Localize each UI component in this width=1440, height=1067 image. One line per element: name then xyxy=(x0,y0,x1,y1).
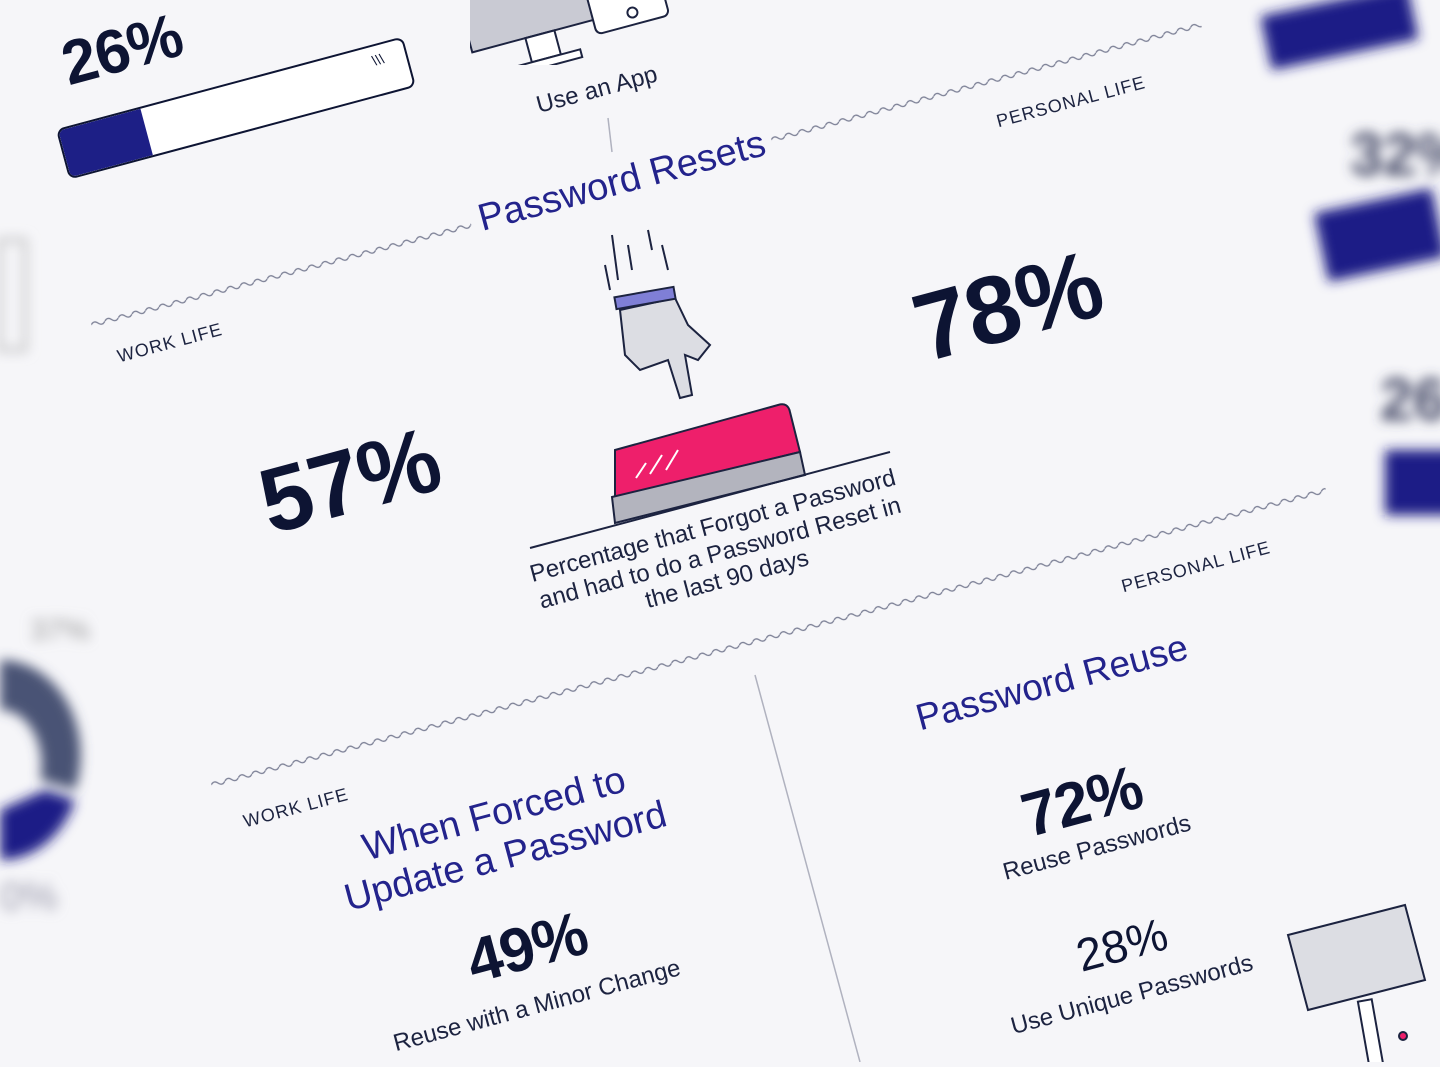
stat: 49%: 49% xyxy=(460,899,594,997)
wavy line: top right xyxy=(770,20,1202,145)
icon: hand pressing button xyxy=(530,230,890,549)
label: personal life 2: PERSONAL LIFE xyxy=(1119,537,1273,596)
caption: forgot password: Percentage that Forgot a Password xyxy=(527,464,899,588)
label: work life: WORK LIFE xyxy=(115,319,225,366)
label: work life 2: WORK LIFE xyxy=(241,784,351,831)
blurred left donut: 37% xyxy=(30,614,90,647)
progress bar xyxy=(56,36,416,180)
label: personal life: PERSONAL LIFE xyxy=(994,72,1148,131)
wavy line: middle xyxy=(210,485,1327,790)
blurred right bars xyxy=(1260,0,1440,515)
icon: monitor xyxy=(470,0,669,65)
title: When Forced to Update a Password: Update a Password xyxy=(340,793,671,919)
label: minor change: Reuse with a Minor Change xyxy=(390,954,683,1057)
caption: forgot password: and had to do a Password Reset in xyxy=(536,491,904,614)
divider xyxy=(755,675,860,1062)
icon: sign xyxy=(1286,904,1426,1062)
label: reuse passwords: Reuse Passwords xyxy=(1000,810,1194,886)
label: Use an App: Use an App xyxy=(533,61,660,119)
blurred left donut: 0% xyxy=(0,875,58,919)
stat: 28%: 28% xyxy=(1071,908,1173,982)
stat: 78%: 78% xyxy=(903,230,1113,382)
stat: 26%: 26% xyxy=(55,1,189,99)
progress bar: \\\ xyxy=(370,50,386,69)
label: unique passwords: Use Unique Passwords xyxy=(1008,949,1256,1040)
stat: 72%: 72% xyxy=(1015,753,1149,851)
title: When Forced to Update a Password: When Forced to xyxy=(358,759,630,869)
stat: 57%: 57% xyxy=(249,408,450,554)
caption: forgot password: the last 90 days xyxy=(642,545,812,614)
wavy line: top left xyxy=(90,220,473,330)
title: Password Resets: Password Resets xyxy=(474,123,770,240)
title: Password Reuse: Password Reuse xyxy=(911,626,1192,738)
blurred left donut xyxy=(0,240,90,919)
